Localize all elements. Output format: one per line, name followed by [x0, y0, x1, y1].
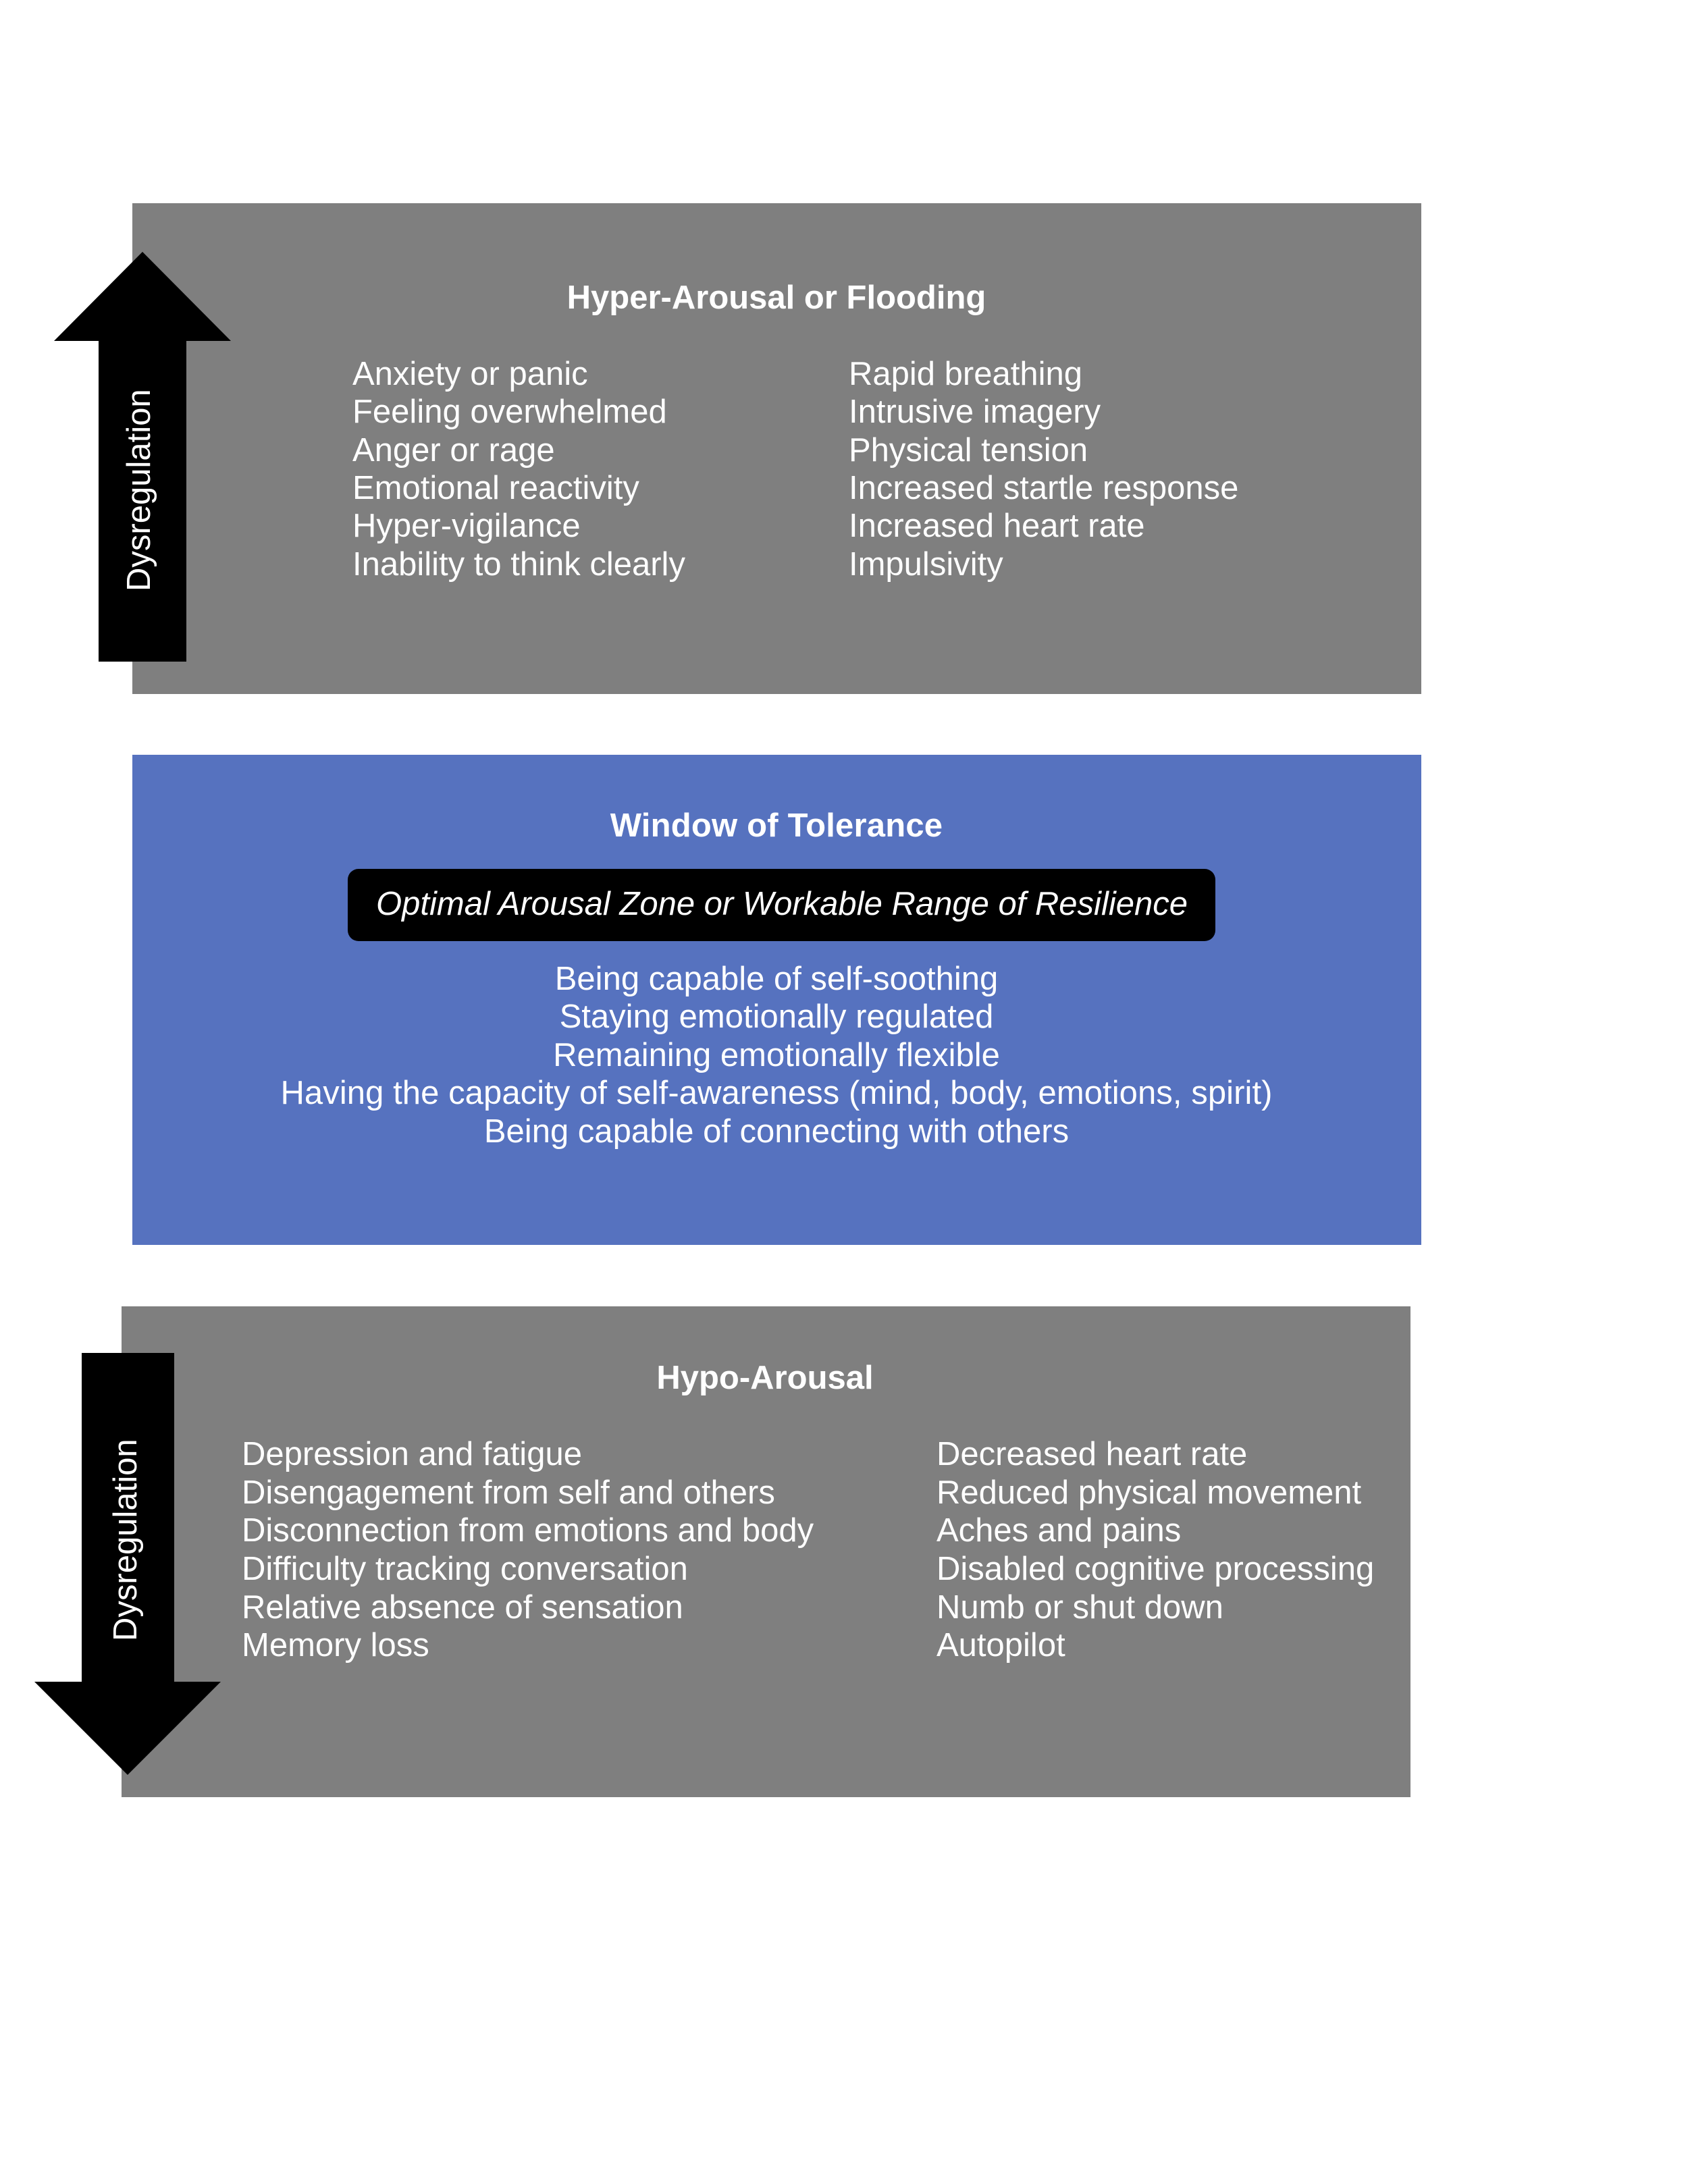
text block: window of tolerance list: Staying emotionally regulated	[560, 998, 993, 1035]
text block: hyper-arousal right column: Impulsivity	[849, 546, 1003, 583]
text block: hypo-arousal left column: Memory loss	[242, 1627, 429, 1663]
text block: hyper-arousal left column: Anger or rage	[352, 432, 555, 469]
text block: hypo-arousal left column	[242, 1436, 814, 1663]
text block: hyper-arousal right column	[849, 356, 1238, 583]
text block: window of tolerance list: Being capable of self-soothing	[555, 961, 998, 997]
label: dysregulation down: Dysregulation	[107, 1439, 144, 1641]
text block: window of tolerance list: Being capable of connecting with others	[484, 1113, 1069, 1150]
text block: hypo-arousal right column: Decreased heart rate	[937, 1436, 1247, 1472]
text block: hyper-arousal right column: Increased startle response	[849, 470, 1238, 506]
callout: optimal arousal zone	[348, 869, 1215, 941]
text block: window of tolerance list	[280, 961, 1273, 1150]
text block: hypo-arousal right column: Autopilot	[937, 1627, 1065, 1663]
text block: hypo-arousal right column: Disabled cognitive processing	[937, 1551, 1374, 1587]
text block: hypo-arousal left column: Depression and fatigue	[242, 1436, 582, 1472]
text block: hyper-arousal left column: Anxiety or panic	[352, 356, 588, 392]
text block: hyper-arousal right column: Physical tension	[849, 432, 1088, 469]
heading: window of tolerance: Window of Tolerance	[610, 807, 943, 844]
text block: hypo-arousal left column: Disconnection from emotions and body	[242, 1512, 814, 1549]
text block: window of tolerance list: Remaining emotionally flexible	[553, 1037, 1000, 1073]
panel: hyper-arousal	[132, 203, 1421, 694]
text block: hyper-arousal left column: Inability to think clearly	[352, 546, 685, 583]
text block: hypo-arousal right column: Reduced physical movement	[937, 1474, 1362, 1511]
label: dysregulation up: Dysregulation	[121, 389, 157, 591]
text block: hypo-arousal left column: Difficulty tracking conversation	[242, 1551, 688, 1587]
text block: hyper-arousal right column: Increased heart rate	[849, 508, 1145, 544]
callout: optimal arousal zone: Optimal Arousal Zone or Workable Range of Resilience	[376, 886, 1188, 922]
text block: hyper-arousal right column: Rapid breathing	[849, 356, 1082, 392]
text block: hyper-arousal left column: Hyper-vigilance	[352, 508, 581, 544]
text block: hypo-arousal left column: Disengagement from self and others	[242, 1474, 775, 1511]
text block: hyper-arousal left column	[352, 356, 685, 583]
text block: hypo-arousal right column: Aches and pains	[937, 1512, 1181, 1549]
text block: window of tolerance list: Having the capacity of self-awareness (mind, body, emotions, spirit)	[280, 1075, 1273, 1111]
heading: hyper-arousal or flooding: Hyper-Arousal or Flooding	[567, 279, 986, 316]
text block: hyper-arousal left column: Feeling overwhelmed	[352, 394, 667, 430]
panel: hypo-arousal	[122, 1306, 1410, 1797]
heading: hypo-arousal: Hypo-Arousal	[656, 1360, 874, 1396]
arrow: dysregulation up	[54, 252, 231, 662]
text block: hyper-arousal right column: Intrusive imagery	[849, 394, 1101, 430]
panel: window of tolerance	[132, 755, 1421, 1245]
arrow: dysregulation down	[34, 1353, 221, 1775]
text block: hyper-arousal left column: Emotional reactivity	[352, 470, 639, 506]
text block: hypo-arousal right column: Numb or shut down	[937, 1589, 1223, 1626]
text block: hypo-arousal right column	[937, 1436, 1374, 1663]
text block: hypo-arousal left column: Relative absence of sensation	[242, 1589, 683, 1626]
